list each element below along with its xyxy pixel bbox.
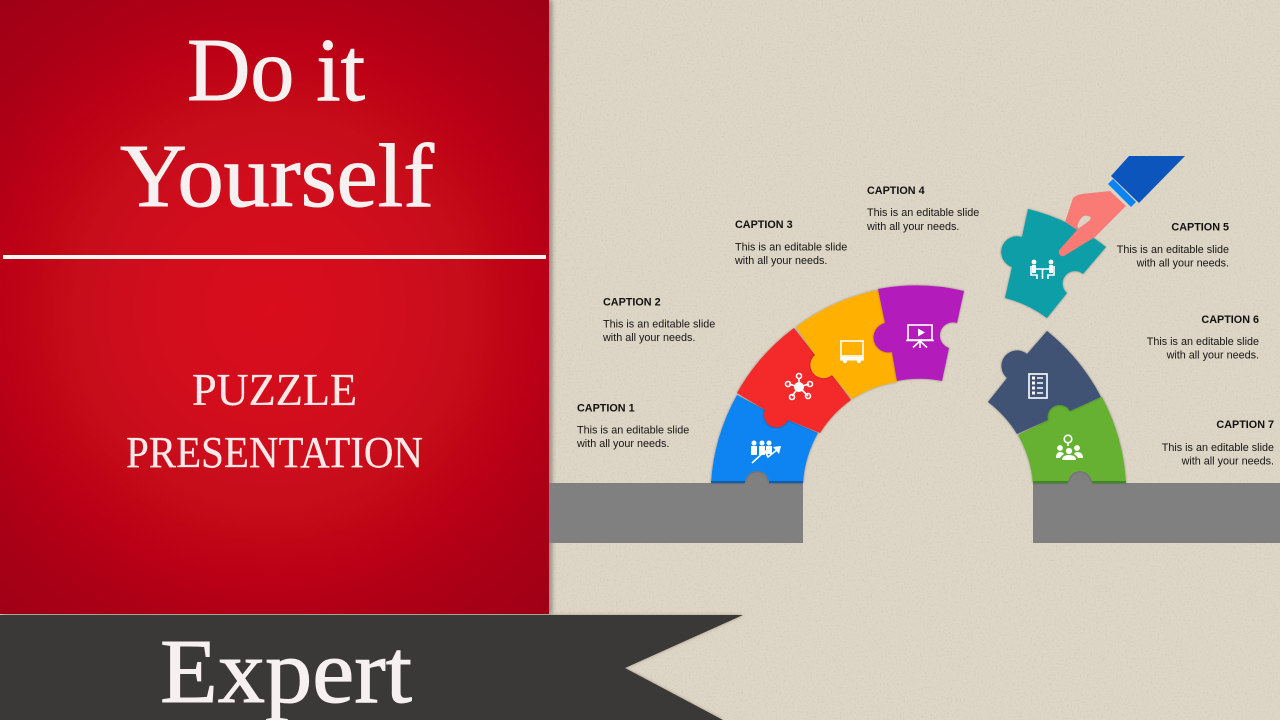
puzzle piece 3: yellow xyxy=(796,290,897,399)
caption 1: CAPTION 1 xyxy=(577,402,635,414)
caption 1 xyxy=(576,402,689,450)
expert ribbon xyxy=(0,615,743,720)
caption 4: This is an editable slide xyxy=(867,207,979,219)
caption 4: with all your needs. xyxy=(866,221,959,233)
icon: people and growth xyxy=(751,440,781,463)
puzzle piece 4: purple xyxy=(874,285,964,381)
left grey platform xyxy=(549,471,803,543)
caption 5 xyxy=(1117,222,1229,270)
puzzle piece 6: navy xyxy=(988,331,1101,434)
caption 2: CAPTION 2 xyxy=(603,296,661,308)
caption 4: CAPTION 4 xyxy=(867,185,925,197)
icon: team with location pin xyxy=(1056,435,1083,460)
caption 2: This is an editable slide xyxy=(603,318,715,330)
cuff xyxy=(1108,179,1136,207)
icon: checklist xyxy=(1029,374,1047,398)
caption 5: This is an editable slide xyxy=(1117,244,1229,256)
caption 2: with all your needs. xyxy=(602,332,695,344)
caption 6: with all your needs. xyxy=(1166,350,1259,362)
caption 3: This is an editable slide xyxy=(735,242,847,254)
hand xyxy=(1059,191,1126,256)
caption 3 xyxy=(734,219,847,267)
icon: network xyxy=(786,374,812,400)
expert ribbon: Expert xyxy=(160,621,412,720)
caption 6: This is an editable slide xyxy=(1147,336,1259,348)
icon: presentation board xyxy=(906,325,934,348)
puzzle piece 1: blue xyxy=(711,395,818,483)
caption 5: CAPTION 5 xyxy=(1171,222,1229,234)
puzzle piece 7: green xyxy=(1018,397,1126,483)
caption 4 xyxy=(866,185,979,233)
caption 1: with all your needs. xyxy=(576,438,669,450)
title: Do it Yourself: Do it xyxy=(187,21,365,120)
caption 2 xyxy=(602,296,715,344)
caption 6 xyxy=(1147,314,1259,362)
subtitle: Puzzle Presentation: PRESENTATION xyxy=(126,428,423,477)
caption 3: with all your needs. xyxy=(734,255,827,267)
caption 6: CAPTION 6 xyxy=(1201,314,1259,326)
puzzle piece 2: red xyxy=(737,328,851,433)
subtitle: Puzzle Presentation: PUZZLE xyxy=(192,364,357,415)
caption 7: CAPTION 7 xyxy=(1216,419,1274,431)
sleeve xyxy=(1111,156,1185,203)
left red title panel xyxy=(0,0,549,614)
caption 7: with all your needs. xyxy=(1181,456,1274,468)
title: Do it Yourself: Yourself xyxy=(120,127,434,226)
title: Do it Yourself xyxy=(120,21,434,226)
caption 3: CAPTION 3 xyxy=(735,219,793,231)
caption 7 xyxy=(1162,419,1274,468)
caption 7: This is an editable slide xyxy=(1162,442,1274,454)
divider line xyxy=(3,255,546,259)
subtitle: Puzzle Presentation xyxy=(126,364,423,477)
caption 1: This is an editable slide xyxy=(577,424,689,436)
right grey platform xyxy=(1033,471,1280,543)
puzzle piece 5: teal xyxy=(1001,209,1106,318)
caption 5: with all your needs. xyxy=(1136,258,1229,270)
icon: meeting at a table xyxy=(1031,260,1054,279)
icon: monitor xyxy=(840,341,864,363)
icon: hand placing puzzle piece xyxy=(1059,156,1185,256)
